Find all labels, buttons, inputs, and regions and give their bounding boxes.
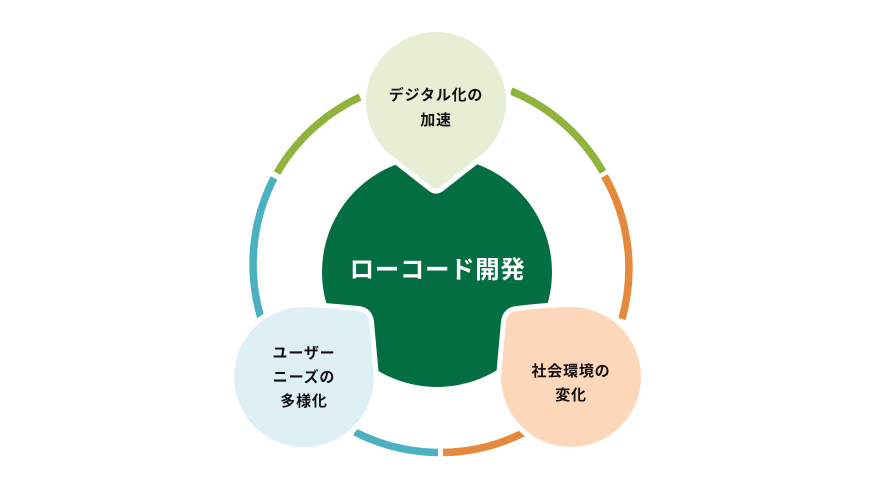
label: デジタル化の bbox=[389, 86, 483, 104]
drop shape: light green bbox=[366, 32, 506, 188]
node: デジタル化の加速 bbox=[366, 32, 506, 188]
ring segment: green left bbox=[277, 97, 360, 173]
drop shape: light orange bbox=[501, 307, 641, 447]
ring segment: orange bottom bbox=[443, 432, 525, 452]
node: ユーザーニーズの多様化: ニーズの bbox=[273, 368, 335, 386]
drop shape: light blue bbox=[234, 307, 374, 447]
ring: segmented outer circle bbox=[253, 91, 629, 452]
node: ユーザーニーズの多様化 bbox=[234, 307, 374, 447]
ring segment: green right bbox=[511, 91, 603, 172]
heading: center title: ローコード開発 bbox=[350, 256, 525, 284]
ring segment: teal bottom bbox=[355, 432, 438, 452]
center circle: ローコード開発 bbox=[322, 157, 552, 387]
label: 社会環境の bbox=[531, 363, 611, 380]
node: ユーザーニーズの多様化: 多様化 bbox=[280, 392, 328, 410]
node: デジタル化の加速: 加速 bbox=[420, 112, 452, 129]
ring segment: orange right bbox=[604, 176, 629, 319]
label: ユーザー bbox=[273, 345, 335, 362]
node: 社会環境の変化: 変化 bbox=[555, 386, 587, 404]
node: 社会環境の変化 bbox=[501, 307, 641, 447]
ring segment: teal left bbox=[253, 178, 274, 318]
